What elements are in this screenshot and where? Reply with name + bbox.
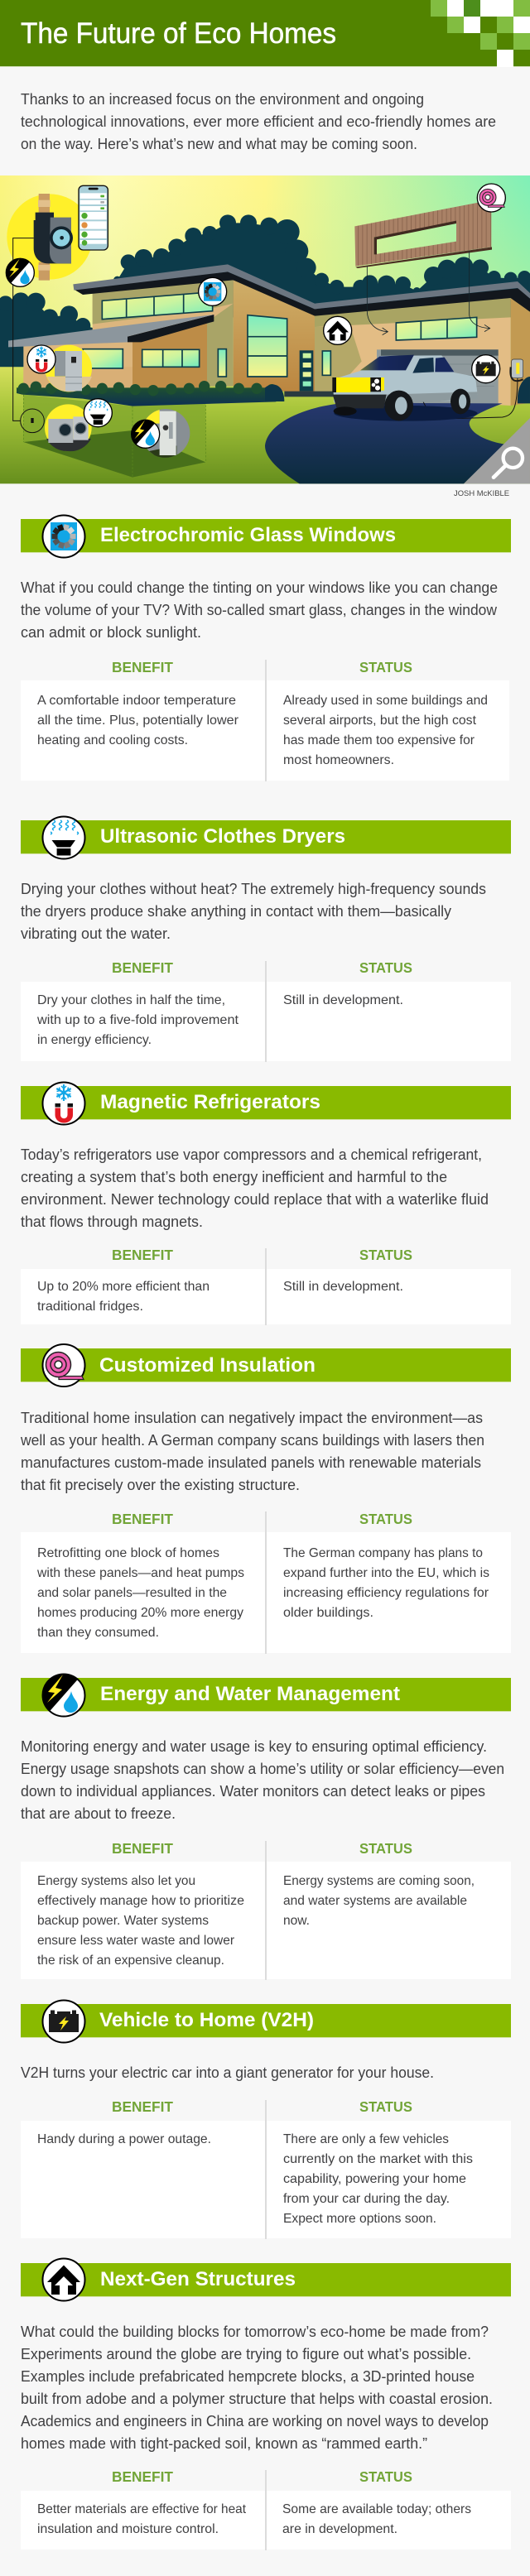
description: the volume of your TV? With so-called smart glass, changes in the window — [21, 601, 498, 618]
lower roof — [128, 315, 214, 342]
heading bar — [21, 1348, 511, 1382]
icon: house with arrow — [43, 2258, 84, 2301]
panel: electrochromic glass windows — [21, 515, 511, 781]
left end wall — [234, 280, 315, 395]
description: the dryers produce shake anything in contact with them—basically — [21, 902, 452, 920]
benefit and status table: with up to a five-fold improvement — [36, 1013, 239, 1027]
benefit and status table — [21, 2098, 511, 2239]
benefit and status table: traditional fridges. — [37, 1300, 143, 1314]
description: Academics and engineers in China are working on novel ways to develop — [21, 2412, 489, 2429]
benefit and status table: Already used in some buildings and — [283, 694, 488, 708]
benefit and status table — [21, 2468, 511, 2550]
benefit and status table: STATUS — [359, 2468, 412, 2485]
benefit and status table: STATUS — [359, 1247, 412, 1263]
lower wall — [23, 320, 207, 387]
pixel pattern — [431, 0, 530, 67]
benefit and status table: and solar panels—resulted in the — [37, 1586, 227, 1600]
benefit and status table: STATUS — [359, 1511, 412, 1527]
description: down to individual appliances. Water monitors can detect leaks or pipes — [21, 1782, 485, 1800]
benefit and status table: Better materials are effective for heat — [37, 2502, 247, 2516]
upper roof — [75, 272, 530, 316]
benefit and status table: The German company has plans to — [283, 1546, 483, 1560]
benefit and status table: STATUS — [359, 1840, 412, 1857]
description — [21, 1737, 504, 1822]
benefit and status table: BENEFIT — [112, 2098, 173, 2115]
insulation panel floating above garage — [354, 200, 492, 335]
description — [21, 880, 486, 942]
benefit and status table: expand further into the EU, which is — [283, 1566, 489, 1580]
panel: ultrasonic clothes dryers — [21, 816, 511, 1062]
benefit and status table: than they consumed. — [37, 1626, 159, 1640]
benefit and status table: Dry your clothes in half the time, — [37, 993, 225, 1007]
benefit and status table: Some are available today; others — [282, 2502, 471, 2516]
benefit and status table: capability, powering your home — [283, 2172, 466, 2186]
benefit and status table — [21, 959, 511, 1062]
description: Monitoring energy and water usage is key to ensuring optimal efficiency. — [21, 1737, 487, 1755]
benefit and status table — [21, 1247, 511, 1325]
icon: car battery — [43, 2000, 84, 2043]
benefit and status table: Energy systems also let you — [37, 1874, 195, 1888]
heading bar: Vehicle to Home (V2H) — [99, 2009, 314, 2031]
benefit and status table: increasing efficiency regulations for — [283, 1586, 489, 1600]
benefit and status table: in energy efficiency. — [37, 1033, 152, 1047]
benefit and status table: and water systems are available — [283, 1894, 467, 1908]
panel: customized insulation — [20, 1344, 511, 1654]
benefit and status table: BENEFIT — [112, 2468, 173, 2485]
benefit and status table — [21, 1840, 511, 1980]
benefit and status table: Handy during a power outage. — [37, 2132, 211, 2146]
description: What if you could change the tinting on your windows like you can change — [21, 579, 498, 596]
heading bar: Customized Insulation — [99, 1354, 316, 1377]
lawn — [0, 367, 530, 483]
icon: vehicle battery — [472, 355, 500, 383]
panel: vehicle to home — [21, 2000, 511, 2239]
title banner — [0, 0, 530, 67]
charging cable — [414, 375, 518, 419]
description: Experiments around the globe are trying to figure out what’s possible. — [21, 2345, 471, 2362]
icon: insulation roll — [43, 1344, 84, 1387]
heading bar — [21, 820, 511, 854]
benefit and status table: older buildings. — [283, 1606, 373, 1620]
description: that are about to freeze. — [21, 1805, 176, 1822]
description — [21, 1146, 489, 1230]
heading bar: Electrochromic Glass Windows — [100, 524, 396, 546]
benefit and status table: Energy systems are coming soon, — [283, 1874, 475, 1888]
benefit and status table: Retrofitting one block of homes — [37, 1546, 219, 1560]
icon: next-gen home — [324, 316, 352, 344]
heading bar — [21, 1678, 511, 1712]
description: vibrating out the water. — [21, 925, 171, 942]
benefit and status table: STATUS — [359, 659, 412, 675]
icon: energy and water on meter — [6, 258, 34, 286]
description: manufactures custom-made insulated panels with renewable materials — [21, 1454, 481, 1471]
tree line — [0, 214, 530, 367]
benefit and status table: BENEFIT — [112, 1511, 173, 1527]
benefit and status table: currently on the market with this — [283, 2152, 473, 2166]
description — [21, 2323, 493, 2452]
underground basement — [23, 395, 205, 478]
benefit and status table: backup power. Water systems — [37, 1914, 209, 1928]
magnifier corner — [464, 418, 530, 483]
benefit and status table — [21, 659, 509, 781]
panel: magnetic refrigerators — [21, 1083, 511, 1325]
heading bar: Ultrasonic Clothes Dryers — [100, 825, 345, 848]
house — [8, 264, 530, 406]
heading bar: Next-Gen Structures — [100, 2268, 296, 2290]
benefit and status table: BENEFIT — [112, 659, 173, 675]
intro text: on the way. Here’s what’s new and what may be coming soon. — [21, 135, 417, 152]
benefit and status table: the risk of an expensive cleanup. — [37, 1954, 224, 1968]
benefit and status table: all the time. Plus, potentially lower — [37, 714, 238, 728]
benefit and status table: BENEFIT — [112, 1247, 173, 1263]
installation arrows — [367, 251, 490, 335]
icon: lightning bolt and water drop — [42, 1674, 84, 1717]
icon: electrochromic window — [199, 277, 227, 305]
benefit and status table: heating and cooling costs. — [37, 733, 188, 747]
description: Today’s refrigerators use vapor compressors and a chemical refrigerant, — [21, 1146, 482, 1163]
heading bar: Energy and Water Management — [100, 1683, 400, 1705]
benefit and status table: are in development. — [282, 2522, 398, 2536]
benefit and status table: BENEFIT — [112, 1840, 173, 1857]
benefit and status table: A comfortable indoor temperature — [37, 694, 236, 708]
benefit and status table: Up to 20% more efficient than — [37, 1280, 210, 1294]
benefit and status table: BENEFIT — [112, 959, 173, 976]
intro text: Thanks to an increased focus on the environment and ongoing — [21, 90, 424, 108]
description — [20, 1409, 484, 1493]
description: Examples include prefabricated hempcrete blocks, a 3D-printed house — [21, 2367, 475, 2385]
title: The Future of Eco Homes — [21, 17, 336, 50]
benefit and status table: homes producing 20% more energy — [37, 1606, 243, 1620]
description — [21, 579, 498, 641]
icon: ultrasonic speaker — [43, 816, 84, 859]
front door — [284, 350, 337, 396]
heading bar — [21, 2263, 511, 2297]
benefit and status table — [21, 1511, 511, 1654]
icon: magnetic refrigerator — [27, 345, 55, 373]
heading bar — [21, 2004, 511, 2038]
benefit and status table: several airports, but the high cost — [283, 714, 477, 728]
description: well as your health. A German company scans buildings with lasers then — [20, 1431, 484, 1449]
far wing — [511, 298, 530, 406]
pickup truck charging — [332, 355, 523, 421]
description: Traditional home insulation can negatively impact the environment—as — [21, 1409, 483, 1426]
description: can admit or block sunlight. — [21, 623, 201, 641]
icon: energy and water on heater — [132, 420, 160, 448]
phone app — [79, 185, 108, 250]
description: that flows through magnets. — [21, 1213, 203, 1230]
washer and dryer vignette — [45, 404, 92, 451]
benefit and status table: has made them too expensive for — [283, 733, 475, 747]
sky — [0, 175, 530, 396]
benefit and status table: Still in development. — [283, 993, 403, 1007]
benefit and status table: effectively manage how to prioritize — [37, 1894, 244, 1908]
hedge — [17, 377, 530, 406]
icon: snowflake and magnet — [43, 1083, 84, 1124]
intro text: technological innovations, ever more efficient and eco-friendly homes are — [21, 113, 496, 130]
description: V2H turns your electric car into a giant generator for your house. — [21, 2064, 434, 2081]
water heater vignette — [142, 409, 190, 458]
benefit and status table: most homeowners. — [283, 753, 394, 767]
panel: next-gen structures — [21, 2258, 511, 2550]
benefit and status table: insulation and moisture control. — [37, 2522, 219, 2536]
benefit and status table: now. — [283, 1914, 310, 1928]
benefit and status table: Expect more options soon. — [283, 2212, 436, 2226]
description: What could the building blocks for tomorrow’s eco-home be made from? — [21, 2323, 489, 2340]
icon: insulation roll — [477, 184, 505, 212]
wall charger — [510, 359, 523, 381]
upper wall — [93, 280, 234, 387]
garage wall — [315, 298, 511, 406]
panel: energy and water management — [21, 1674, 511, 1980]
description: that fit precisely over the existing structure. — [21, 1476, 300, 1493]
benefit and status table: There are only a few vehicles — [283, 2132, 449, 2146]
illustration credit: JOSH McKIBLE — [454, 489, 509, 498]
benefit and status table: ensure less water waste and lower — [37, 1934, 234, 1948]
description: Energy usage snapshots can show a home’s utility or solar efficiency—even — [21, 1760, 504, 1777]
heading bar — [21, 519, 511, 553]
benefit and status table: Still in development. — [283, 1280, 403, 1294]
garage door — [377, 349, 499, 404]
benefit and status table: with these panels—and heat pumps — [36, 1566, 244, 1580]
benefit and status table: STATUS — [359, 959, 412, 976]
illustration: eco home with labelled technologies — [0, 175, 530, 483]
icon: tinted window — [43, 515, 84, 558]
refrigerator vignette — [45, 345, 92, 392]
intro text — [21, 90, 496, 152]
icon: ultrasonic dryer — [84, 399, 112, 427]
windows — [83, 292, 477, 377]
smart water meter — [7, 194, 93, 433]
benefit and status table: from your car during the day. — [283, 2192, 450, 2206]
description: environment. Newer technology could replace that with a waterlike fluid — [21, 1190, 489, 1208]
heading bar — [21, 1086, 511, 1120]
description: Drying your clothes without heat? The extremely high-frequency sounds — [21, 880, 486, 897]
description: creating a system that’s both energy inefficient and harmful to the — [21, 1168, 447, 1185]
heading bar: Magnetic Refrigerators — [100, 1091, 320, 1113]
description: built from adobe and a polymer structure that helps with coastal erosion. — [21, 2390, 493, 2407]
driveway — [265, 403, 505, 483]
description: homes made with tight-packed soil, known as “rammed earth.” — [21, 2434, 427, 2452]
benefit and status table: STATUS — [359, 2098, 412, 2115]
